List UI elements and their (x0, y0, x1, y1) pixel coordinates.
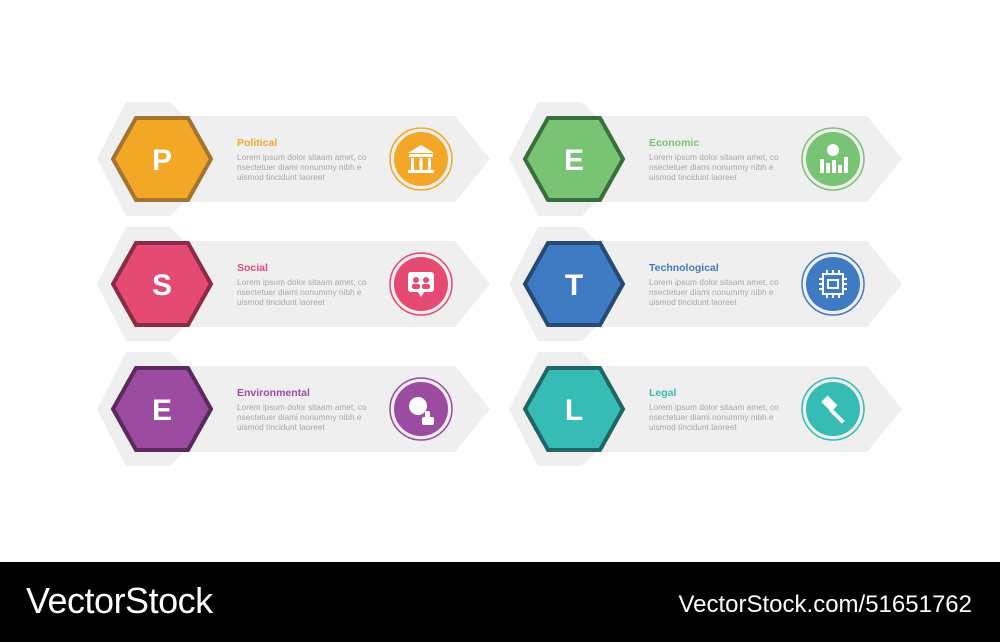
panel: Legal (509, 352, 902, 466)
text: Technological: Technological (649, 262, 719, 274)
panel: Economic: E (564, 144, 584, 177)
panel: Environmental: E (152, 394, 172, 427)
text: Political: Political (237, 137, 277, 149)
footer id: VectorStock.com/51651762 (678, 591, 972, 618)
panel: Technological: T (565, 269, 583, 302)
text: Lorem ipsum dolor sitaam amet, co nsectetuer diami nonummy nibh e uismod tincidunt laoreet (237, 152, 367, 182)
panel: Political (97, 102, 490, 216)
text: Lorem ipsum dolor sitaam amet, co nsectetuer diami nonummy nibh e uismod tincidunt laoreet (649, 277, 779, 307)
footer logo: VectorStock (26, 580, 213, 621)
panel: Legal: L (565, 394, 583, 427)
text: Lorem ipsum dolor sitaam amet, co nsectetuer diami nonummy nibh e uismod tincidunt laoreet (237, 277, 367, 307)
panel: Social: S (152, 269, 172, 302)
panel: Technological (509, 227, 902, 341)
text: Economic: Economic (649, 137, 699, 149)
text: Environmental: Environmental (237, 387, 310, 399)
text: Lorem ipsum dolor sitaam amet, co nsectetuer diami nonummy nibh e uismod tincidunt laoreet (649, 402, 779, 432)
text: Lorem ipsum dolor sitaam amet, co nsectetuer diami nonummy nibh e uismod tincidunt laoreet (649, 152, 779, 182)
panel: Economic (509, 102, 902, 216)
panel: Environmental (97, 352, 490, 466)
text: Social: Social (237, 262, 268, 274)
footer band (0, 562, 1000, 642)
text: Lorem ipsum dolor sitaam amet, co nsectetuer diami nonummy nibh e uismod tincidunt laoreet (237, 402, 367, 432)
text: Legal: Legal (649, 387, 676, 399)
panel: Political: P (152, 144, 172, 177)
panel: Social (97, 227, 490, 341)
